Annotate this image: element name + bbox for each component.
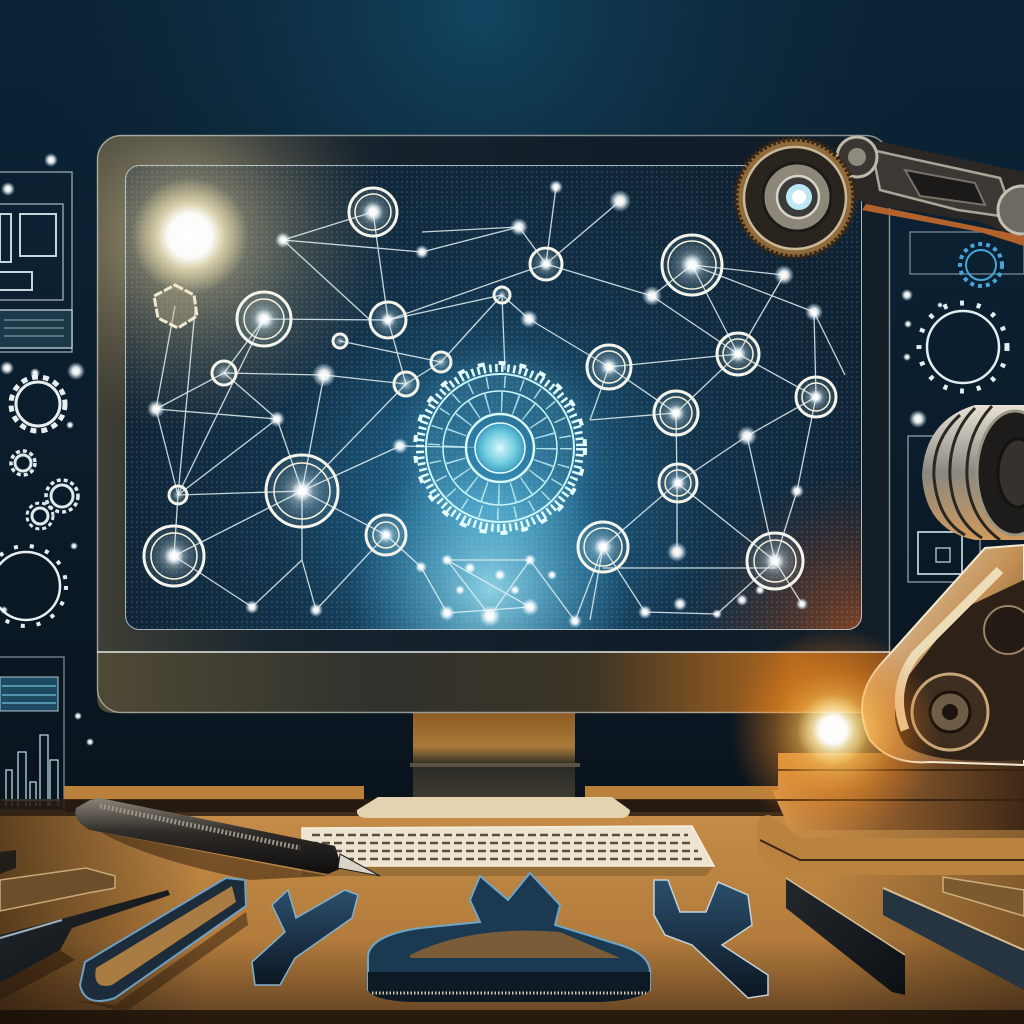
tool: central clamp — [368, 873, 650, 1002]
tool: small spanner — [252, 890, 358, 985]
network diagram — [144, 180, 845, 628]
robot arm: lower — [757, 405, 1024, 875]
tool: long loop wrench — [75, 878, 248, 1012]
tool: left screwdriver — [0, 890, 170, 1000]
robot arm: upper — [736, 137, 1024, 257]
panel: left bar chart — [0, 657, 64, 811]
arm links — [862, 545, 1024, 765]
light flare: top left — [132, 178, 248, 294]
panel: right side interface icons — [908, 232, 1024, 582]
central gear hub — [410, 358, 590, 538]
monitor screen — [125, 165, 862, 630]
icon: right large gear — [919, 303, 1007, 391]
panel: left side interface icons — [0, 172, 78, 811]
panel: right lower frames — [908, 436, 980, 582]
left glowing dots — [0, 153, 94, 746]
desk — [0, 786, 1024, 1024]
icon: left gear pair — [27, 480, 78, 529]
light flare: robot base — [730, 627, 940, 837]
tool: flat bar centre right — [786, 878, 905, 995]
icon: left gear small — [11, 451, 35, 475]
base plates — [757, 753, 1024, 875]
tool: short bar far right — [943, 877, 1024, 916]
monitor — [97, 135, 890, 713]
icon: right blue gear — [960, 244, 1002, 286]
network edges — [156, 187, 845, 621]
tool: small left bars — [0, 850, 115, 911]
icon: left gear large — [11, 377, 65, 431]
inner rings of nodes — [151, 194, 830, 582]
keyboard — [302, 826, 714, 876]
small glowing nodes — [147, 180, 823, 628]
cylinder joint — [922, 405, 1024, 540]
hexagon node — [154, 285, 197, 328]
icon: left gear cut off — [0, 546, 66, 626]
large ring nodes — [144, 188, 836, 589]
monitor stand — [357, 712, 630, 818]
tool: open wrench — [654, 880, 768, 998]
tool: flat bar right — [883, 888, 1024, 990]
tool: pen soldering iron — [75, 798, 380, 880]
